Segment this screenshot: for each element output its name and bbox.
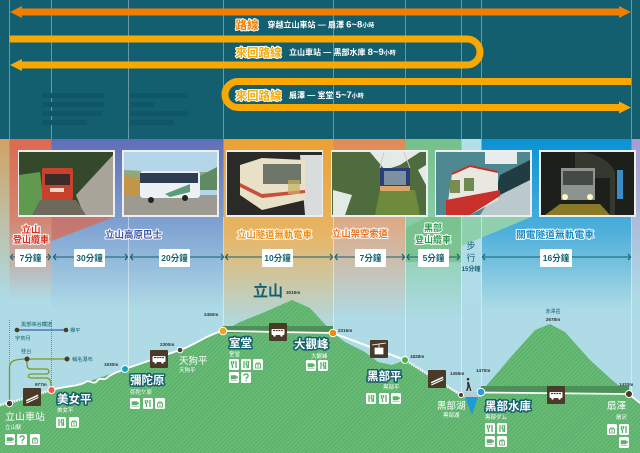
station: Kurobeko: 黒部湖 — [443, 411, 460, 419]
station: Daikanbo: 大観峰 — [311, 352, 328, 360]
elevation and peak labels: 2450m — [204, 312, 218, 317]
side route: Kurobe gorge and Shomyo falls: 宇奈月 — [15, 334, 31, 342]
photo: Kurobe cable car — [435, 150, 532, 217]
transport labels — [13, 222, 594, 246]
side route: Kurobe gorge and Shomyo falls — [10, 320, 93, 403]
Kurobe lake — [461, 392, 481, 415]
elevation and peak labels: 1828m — [410, 354, 424, 359]
elevation and peak labels: 1470m — [476, 368, 490, 373]
route label 3: 來回路線 — [236, 88, 282, 102]
route label 1 — [236, 18, 374, 32]
route label 2 — [236, 46, 396, 60]
route label 3 — [236, 88, 364, 102]
station: Kurobe Dam: 黒部ダム — [485, 413, 508, 421]
station: Ogizawa — [607, 400, 629, 448]
time pills and arrows — [10, 249, 630, 267]
photo: Kanden tunnel trolley bus — [539, 150, 636, 217]
station: Bijodaira — [56, 392, 92, 428]
station: Daikanbo: 大觀峰 — [294, 337, 329, 351]
elevation and peak labels: 2316m — [338, 328, 352, 333]
station: Murodo — [229, 336, 263, 383]
elevation and peak labels: 2300m — [160, 342, 174, 347]
elevation and peak labels: 977m — [35, 382, 47, 387]
route label 3: 扇澤 — 室堂 5~7小時 — [289, 90, 364, 101]
walking segment label — [462, 241, 480, 273]
time pills and arrows: 30分鐘 — [76, 253, 103, 263]
station: Tateyama — [5, 411, 46, 445]
station: Kurobeko — [437, 400, 466, 419]
station: Tengudaira — [179, 355, 208, 374]
time pills and arrows: 20分鐘 — [161, 253, 188, 263]
station: Kurobe Dam — [485, 399, 531, 447]
station: Tateyama: 立山車站 — [5, 411, 46, 423]
transport labels: 黑部 — [424, 222, 442, 233]
walking segment label: 15分鐘 — [462, 265, 480, 273]
faint background text blocks — [42, 93, 188, 125]
station: Tengudaira: 天狗平 — [179, 366, 196, 374]
station: Bijodaira: 美女平 — [57, 392, 92, 406]
side route: Kurobe gorge and Shomyo falls: 稱名瀑布 — [72, 355, 93, 363]
station: Kurobe Dam: 黑部水庫 — [485, 399, 531, 413]
walking segment label: 行 — [466, 252, 476, 263]
station: Midagahara: 弥陀ケ原 — [130, 388, 153, 396]
route label 2: 立山車站 — 黑部水庫 8~9小時 — [289, 47, 396, 58]
elevation and peak labels: 2678m — [546, 317, 560, 322]
station: Tateyama: 立山駅 — [5, 423, 22, 431]
station: Midagahara — [130, 373, 165, 409]
transport labels: 關電隧道無軌電車 — [516, 229, 594, 241]
station: Kurobedaira: 黒部平 — [383, 383, 400, 391]
hiker icon — [466, 378, 472, 391]
side route: Kurobe gorge and Shomyo falls: 桂台 — [21, 347, 31, 355]
photo: Tateyama cable car — [18, 150, 115, 217]
route arrow: full crossing — [10, 6, 631, 18]
photo: highland bus — [122, 150, 219, 217]
transport labels: 登山纜車 — [415, 234, 451, 245]
transport labels: 登山纜車 — [13, 234, 49, 246]
route label 1: 穿越立山車站 — 扇澤 6~8小時 — [268, 20, 374, 30]
route arrow: return Tateyama to Kurobe Dam — [10, 39, 480, 71]
station: Kurobedaira — [366, 369, 402, 404]
route track line — [0, 331, 640, 405]
route label 1: 路線 — [236, 18, 259, 32]
station: Bijodaira: 美女平 — [57, 406, 74, 414]
mountain terrain — [0, 300, 640, 453]
transport labels: 立山高原巴士 — [105, 229, 162, 241]
elevation and peak labels: 1455m — [450, 371, 464, 376]
time pills and arrows: 16分鐘 — [543, 253, 570, 263]
elevation and peak labels: 1930m — [104, 362, 118, 367]
elevation and peak labels — [35, 282, 633, 387]
side route: Kurobe gorge and Shomyo falls: 欅平 — [70, 326, 80, 334]
station: Ogizawa: 扇沢 — [616, 413, 628, 421]
station: Kurobedaira: 黑部平 — [367, 369, 402, 383]
station: Murodo: 室堂 — [229, 350, 241, 358]
station: Midagahara: 彌陀原 — [130, 373, 165, 387]
transport labels: 立山隧道無軌電車 — [237, 229, 312, 241]
elevation and peak labels: 1433m — [619, 382, 633, 387]
elevation and peak labels: 3015m — [286, 290, 300, 295]
station: Kurobeko: 黑部湖 — [437, 400, 466, 412]
route label 2: 來回路線 — [236, 46, 282, 60]
transport labels: 立山 — [21, 224, 41, 236]
elevation and peak labels: 立山 — [253, 282, 283, 300]
side route: Kurobe gorge and Shomyo falls: 黒部峡谷鐵道 — [21, 320, 53, 328]
vehicle icons on route — [23, 323, 565, 406]
time pills and arrows: 7分鐘 — [360, 253, 382, 263]
route arrow: return Ogizawa to Murodo — [225, 82, 631, 114]
station nodes — [6, 327, 633, 407]
station: Murodo: 室堂 — [229, 336, 252, 350]
station: Daikanbo — [294, 337, 329, 371]
time pills and arrows: 5分鐘 — [423, 253, 445, 263]
station: Tengudaira: 天狗平 — [179, 355, 208, 367]
station: Ogizawa: 扇澤 — [607, 400, 626, 412]
dashed alignment lines — [10, 320, 52, 403]
walking segment label: 步 — [466, 241, 476, 251]
transport labels: 立山架空索道 — [332, 228, 388, 240]
photo: ropeway — [331, 150, 428, 217]
time pills and arrows: 10分鐘 — [264, 253, 291, 263]
time pills and arrows: 7分鐘 — [20, 253, 42, 263]
tunnel bands — [223, 326, 629, 393]
photo: Tateyama tunnel trolley bus — [226, 150, 323, 217]
colour columns for each transport segment — [0, 139, 640, 453]
elevation and peak labels: 赤澤岳 — [545, 308, 561, 315]
